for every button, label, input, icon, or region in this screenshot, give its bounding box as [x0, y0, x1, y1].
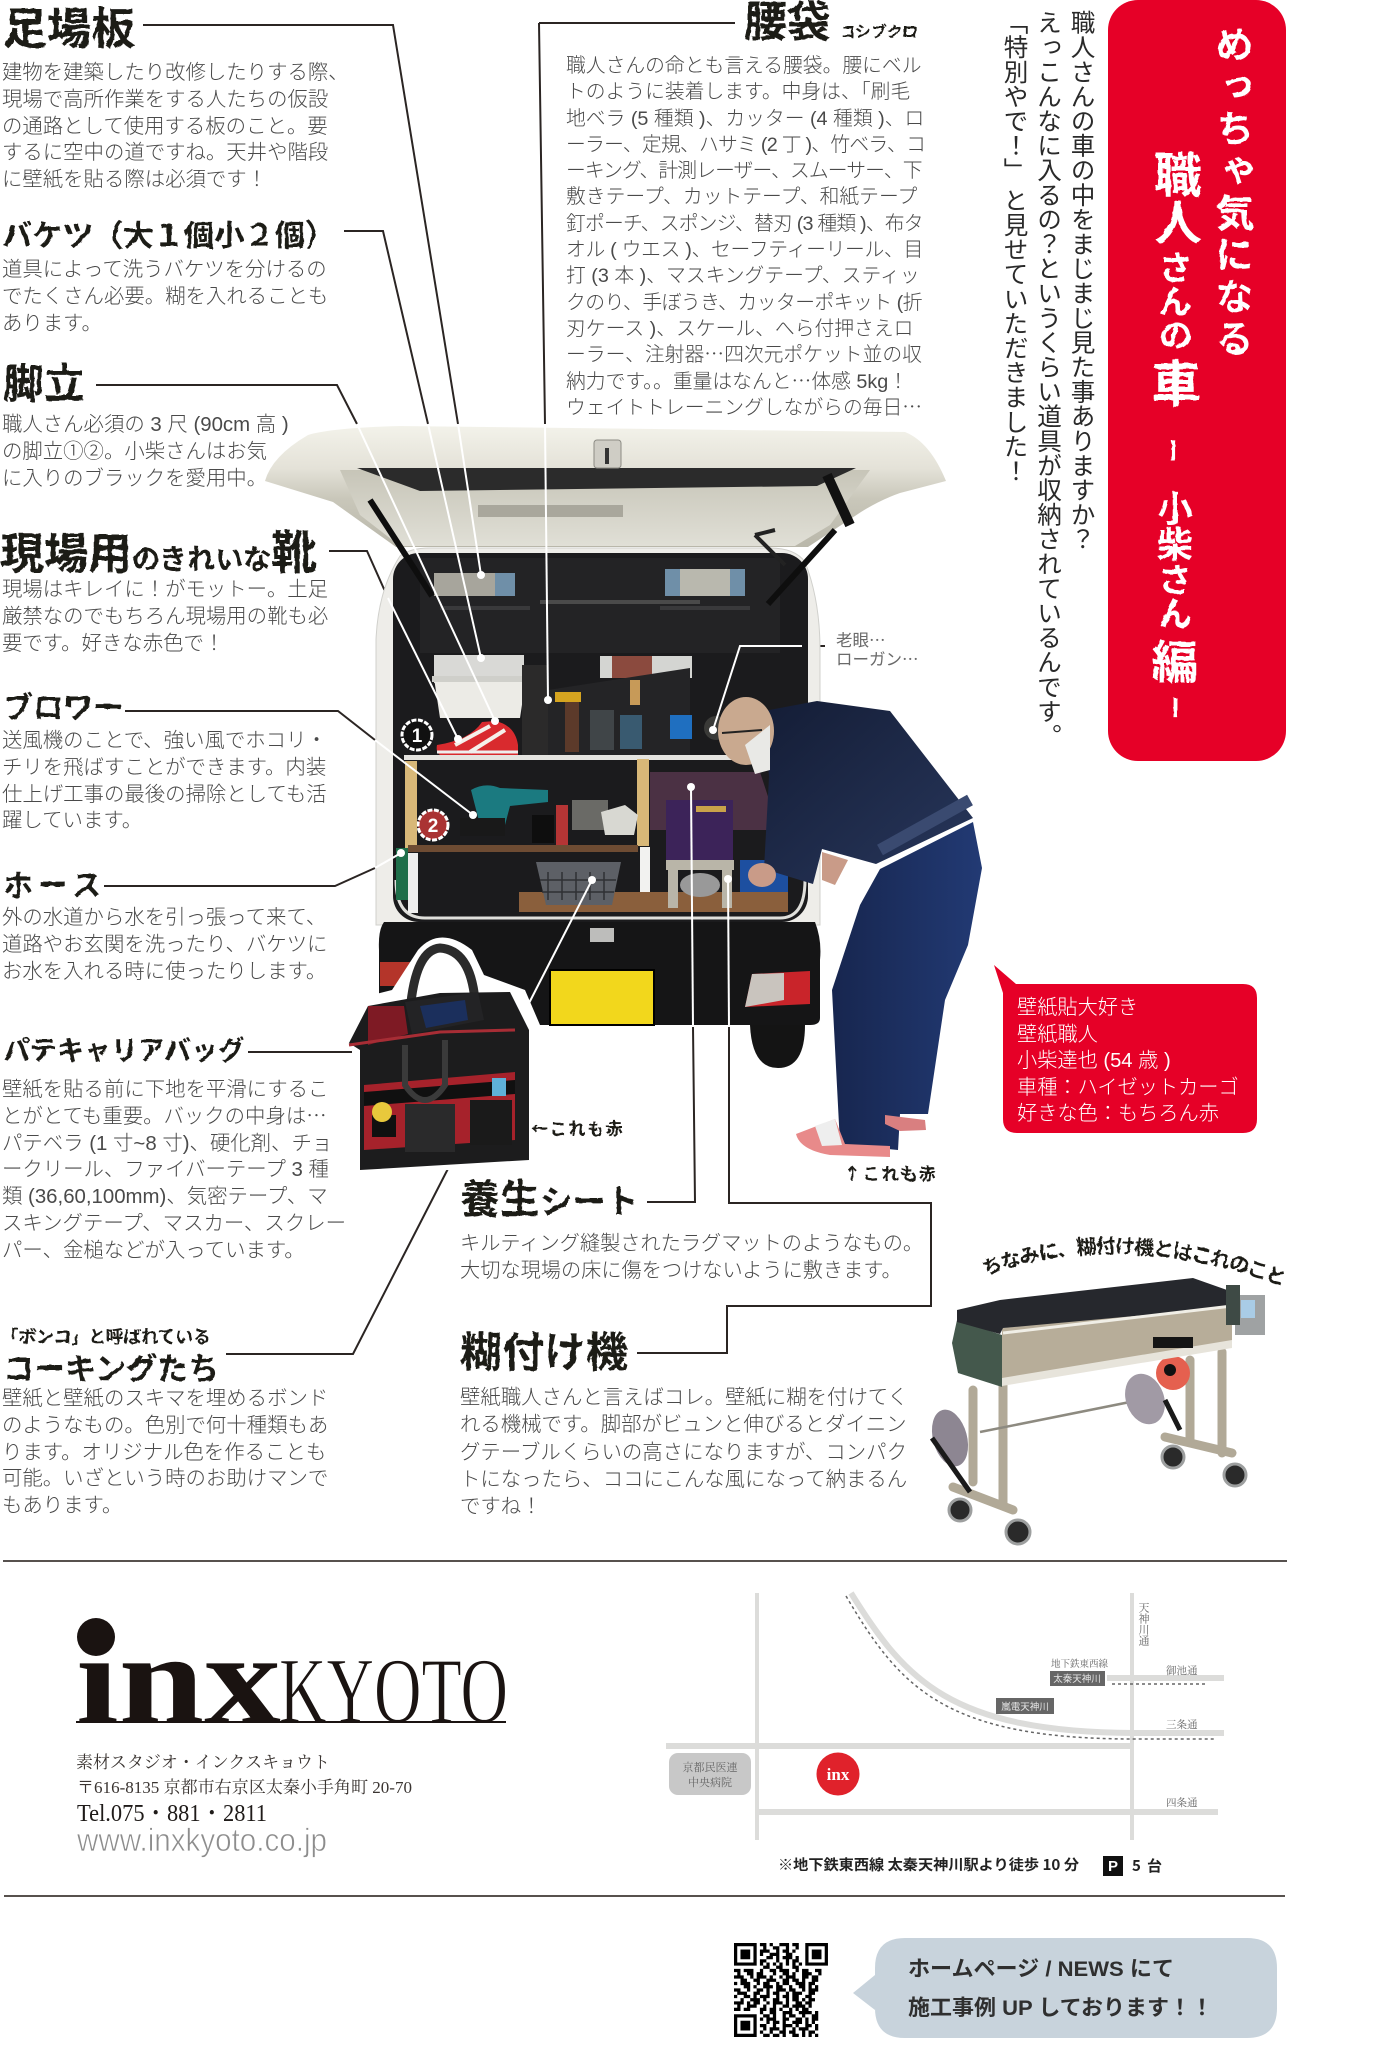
panel: floor protection sheet — [460, 1178, 923, 1282]
panel: hose — [2, 870, 327, 983]
shop address: www.inxkyoto.co.jp — [76, 1822, 327, 1858]
body: トのように装着します。中身は、「刷毛 — [566, 81, 910, 103]
callout text: 壁紙貼大好き — [1017, 997, 1138, 1019]
logo: KYOTO — [279, 1640, 508, 1743]
map labels: 天神川通 — [1136, 1602, 1152, 1646]
heading: 足場板 — [3, 5, 135, 54]
body: 現場はキレイに！がモットー。土足 — [2, 579, 328, 601]
stations — [1050, 1671, 1105, 1686]
intro text: 職人さんの車の中をまじまじ見た事ありますか？ — [1065, 10, 1101, 551]
body — [460, 1232, 923, 1282]
body: オル ( ウエス )、セーフティーリール、目 — [566, 239, 923, 261]
map: 中央病院 — [688, 1774, 732, 1790]
body: 釘ポーチ、スポンジ、替刃 (3 種類 )、布タ — [566, 213, 923, 235]
hospital — [669, 1753, 751, 1795]
body: れる機械です。脚部がビュンと伸びるとダイニン — [460, 1414, 907, 1436]
body: の通路として使用する板のこと。要 — [2, 116, 328, 138]
heading: ホース — [3, 870, 106, 903]
purple bag — [666, 800, 733, 860]
body — [2, 258, 328, 335]
heading: ブロワー — [3, 692, 123, 725]
map: inx — [827, 1765, 850, 1784]
body: パテベラ (1 寸~8 寸)、硬化剤、チョ — [2, 1133, 332, 1155]
panel: tool pouch — [566, 0, 925, 420]
cargo interior — [393, 553, 808, 922]
body: ーラー、定規、ハサミ (2 丁 )、竹ベラ、コ — [566, 134, 925, 156]
panel: shoes — [0, 527, 328, 655]
body: ウェイトトレーニングしながらの毎日… — [566, 391, 922, 420]
map labels: 御池通 — [1166, 1663, 1198, 1678]
map: 京都民医連 — [682, 1759, 738, 1775]
shop address: 〒616-8135 京都市右京区太秦小手角町 20-70 — [77, 1778, 412, 1797]
body: 外の水道から水を引っ張って来て、 — [2, 907, 326, 929]
footer rules — [3, 1561, 1287, 1896]
quilted mat — [650, 772, 780, 830]
heading: パテキャリアバッグ — [3, 1036, 245, 1066]
shop address: 素材スタジオ・インクスキョウト — [76, 1753, 330, 1772]
jeans — [832, 822, 982, 1150]
map: 5 台 — [1132, 1855, 1162, 1876]
tyre — [750, 1025, 805, 1068]
body: 現場で高所作業をする人たちの仮設 — [2, 89, 328, 111]
railway dashes — [846, 1596, 1215, 1739]
shop address: Tel.075・881・2811 — [77, 1801, 267, 1827]
red roll — [1156, 1356, 1190, 1390]
van body — [376, 548, 820, 925]
machine body — [1002, 1305, 1232, 1385]
body: 納力です。。重量はなんと…体感 5kg！ — [566, 365, 908, 394]
inx marker — [816, 1752, 860, 1796]
body — [460, 1386, 908, 1518]
panel: scaffold board — [2, 5, 349, 191]
body: キルティング縫製されたラグマットのようなもの。 — [460, 1233, 923, 1255]
heading: コーキングたち — [3, 1352, 219, 1387]
qr code — [734, 1943, 828, 2037]
body — [566, 55, 925, 420]
heading: バケツ（大１個小２個） — [2, 211, 335, 255]
body: 地ベラ (5 種類 )、カッター (4 種類 )、ロ — [566, 108, 924, 130]
roof lights — [434, 573, 514, 596]
body: するに空中の道ですね。天井や階段 — [2, 142, 328, 164]
intro text — [998, 10, 1101, 748]
shelves — [404, 755, 739, 760]
heading: 養生シート — [460, 1178, 639, 1222]
fan discs — [926, 1406, 974, 1470]
logo: inx — [76, 1608, 281, 1752]
speech bubble — [853, 1938, 1277, 2038]
body: 厳禁なのでもちろん現場用の靴も必 — [2, 606, 328, 628]
van — [265, 426, 946, 1068]
body: ーラー、注射器…四次元ポケット並の収 — [566, 338, 922, 367]
panel: caulking — [1, 1327, 328, 1517]
black leader lines — [96, 23, 931, 1354]
body: 刃ケース )、スケール、へら付押さえロ — [566, 318, 913, 340]
gas struts — [370, 500, 835, 604]
callout text: 壁紙職人 — [1017, 1024, 1098, 1046]
body: 類 (36,60,100mm)、気密テープ、マ — [2, 1186, 328, 1208]
title line 1: めっちゃ気になる — [1209, 25, 1251, 361]
panel: blower — [2, 692, 327, 832]
body: ーキング、計測レーザー、スムーサー、下 — [566, 160, 922, 182]
title line 2: 職人 さんの 車 ー 小柴 さん 編 ー — [1144, 150, 1200, 720]
tailgate — [265, 426, 946, 547]
body: でたくさん必要。糊を入れることも — [2, 286, 328, 308]
logo — [76, 1608, 508, 1752]
van: 2 — [428, 816, 438, 837]
callout text: 車種：ハイゼットカーゴ — [1017, 1076, 1239, 1098]
handwritten note: sandals: ↑これも赤 — [844, 1160, 936, 1185]
handwritten note: bag: ←これも赤 — [531, 1115, 623, 1140]
reading: コシブクロ — [840, 24, 918, 41]
head — [718, 697, 774, 765]
jacket — [764, 701, 973, 884]
shop address — [76, 1753, 412, 1858]
map: 太秦天神川 — [1053, 1671, 1101, 1685]
person — [718, 697, 982, 1157]
note: reading glasses: ローガン… — [836, 646, 918, 670]
body: 要です。好きな赤色で！ — [2, 633, 224, 655]
note: reading glasses: 老眼… — [836, 627, 886, 651]
body: トになったら、ココにこんな風になって納まるん — [460, 1469, 907, 1491]
body: パー、金槌などが入っています。 — [2, 1240, 305, 1262]
panel: stepladder — [2, 361, 289, 490]
white leader lines over van — [357, 424, 802, 1027]
parking — [1103, 1856, 1123, 1876]
map: 嵐電天神川 — [1001, 1699, 1049, 1713]
body — [2, 414, 289, 490]
callout: profile — [994, 965, 1257, 1133]
handwritten note: machine: ちなみに、糊付け機とはこれのこと — [982, 1236, 1284, 1286]
panel: title — [1108, 0, 1286, 761]
heading small: 「ボンコ」と呼ばれている — [1, 1327, 210, 1347]
rear window view — [600, 656, 692, 678]
tool bag — [349, 938, 540, 1175]
body: 壁紙を貼る前に下地を平滑にするこ — [2, 1079, 328, 1101]
red shoes — [437, 721, 518, 757]
body — [2, 1388, 328, 1517]
callout bubble — [994, 965, 1257, 1133]
body: 道具によって洗うバケツを分けるの — [2, 259, 327, 281]
map labels: 地下鉄東西線 — [1051, 1656, 1109, 1670]
callout text — [1017, 996, 1239, 1125]
body — [2, 578, 328, 655]
map labels — [1051, 1602, 1198, 1810]
heading: 糊付け機 — [460, 1329, 628, 1376]
body — [2, 1078, 346, 1262]
intro text: 「特別やで！」 と見せていただきました！ — [998, 10, 1034, 483]
bumper — [379, 922, 820, 1025]
machine legs — [953, 1352, 1232, 1510]
note: reading glasses — [836, 627, 918, 670]
heading: 腰袋 — [744, 0, 830, 47]
blower — [460, 785, 548, 836]
map roads — [666, 1593, 1224, 1840]
speech bubble: ホームページ / NEWS にて — [908, 1957, 1174, 1981]
callout text: 小柴達也 (54 歳 ) — [1017, 1050, 1171, 1072]
body: 打 (3 本 )、マスキングテープ、スティッ — [566, 265, 920, 287]
heading: 現場用のきれいな靴 — [0, 527, 317, 579]
panel: buckets — [2, 211, 335, 335]
body: グテーブルくらいの高さになりますが、コンパク — [460, 1442, 907, 1464]
stool — [666, 860, 734, 908]
body: チリを飛ばすことができます。内装 — [2, 757, 326, 779]
body — [2, 62, 349, 191]
body: 建物を建築したり改修したりする際、 — [2, 62, 349, 84]
body — [2, 906, 327, 983]
map labels: 三条通 — [1166, 1717, 1198, 1732]
van: 1 — [412, 726, 423, 747]
map labels: 四条通 — [1166, 1795, 1198, 1810]
heading: 脚立 — [3, 361, 85, 407]
panel: glue machine — [460, 1329, 908, 1518]
basket — [536, 862, 621, 905]
callout text: 好きな色：もちろん赤 — [1017, 1103, 1219, 1125]
tool pouch — [522, 665, 728, 757]
body: クのり、手ぼうき、カッターポキット (折 — [566, 292, 922, 314]
body: 職人さん必須の 3 尺 (90cm 高 ) — [2, 414, 289, 436]
tail lamp — [745, 971, 810, 1007]
body: 壁紙職人さんと言えばコレ。壁紙に糊を付けてく — [460, 1387, 908, 1409]
body: 壁紙と壁紙のスキマを埋めるボンド — [2, 1388, 328, 1410]
body: お水を入れる時に使ったりします。 — [2, 961, 326, 983]
body: 送風機のことで、強い風でホコリ・ — [2, 730, 327, 752]
hands — [748, 863, 776, 887]
speech bubble: 施工事例 UP しております！！ — [908, 1996, 1213, 2020]
map: P — [1108, 1858, 1118, 1875]
body: もあります。 — [2, 1495, 122, 1517]
wheels — [949, 1446, 1246, 1544]
body: 敷きテープ、カットテープ、和紙テープ — [566, 186, 917, 208]
body: の脚立①②。小柴さんはお気 — [2, 441, 267, 463]
glue machine — [926, 1278, 1265, 1544]
body — [2, 730, 327, 832]
body: 職人さんの命とも言える腰袋。腰にベル — [566, 55, 921, 77]
body: 可能。いざという時のお助けマンで — [2, 1468, 328, 1490]
body: のようなもの。色別で何十種類もあ — [2, 1415, 328, 1437]
body: 仕上げ工事の最後の掃除としても活 — [2, 784, 327, 806]
body: ークリール、ファイバーテープ 3 種 — [2, 1159, 329, 1181]
body: 躍しています。 — [2, 810, 142, 832]
body: ります。オリジナル色を作ることも — [2, 1442, 326, 1464]
numbered circles — [402, 720, 448, 840]
body: 道路やお玄関を洗ったり、バケツに — [2, 934, 327, 956]
shelf items — [556, 805, 568, 845]
body: あります。 — [2, 313, 102, 335]
body: に壁紙を貼る際は必須です！ — [2, 169, 267, 191]
bucket — [432, 655, 526, 718]
body: ですね！ — [460, 1496, 542, 1518]
body: とがとても重要。バックの中身は… — [2, 1099, 327, 1129]
sandals — [796, 1119, 890, 1157]
license plate — [550, 970, 654, 1025]
panel: putty carrier bag — [2, 1036, 346, 1262]
access note: ※地下鉄東西線 太秦天神川駅より徒歩 10 分 — [778, 1854, 1080, 1875]
body: に入りのブラックを愛用中。 — [2, 468, 267, 490]
intro text: えっこんなに入るの？というくらい道具が収納されているんです。 — [1032, 10, 1068, 748]
map — [666, 1593, 1224, 1876]
body: 大切な現場の床に傷をつけないように敷きます。 — [460, 1260, 902, 1282]
body: スキングテープ、マスカー、スクレー — [2, 1213, 346, 1235]
